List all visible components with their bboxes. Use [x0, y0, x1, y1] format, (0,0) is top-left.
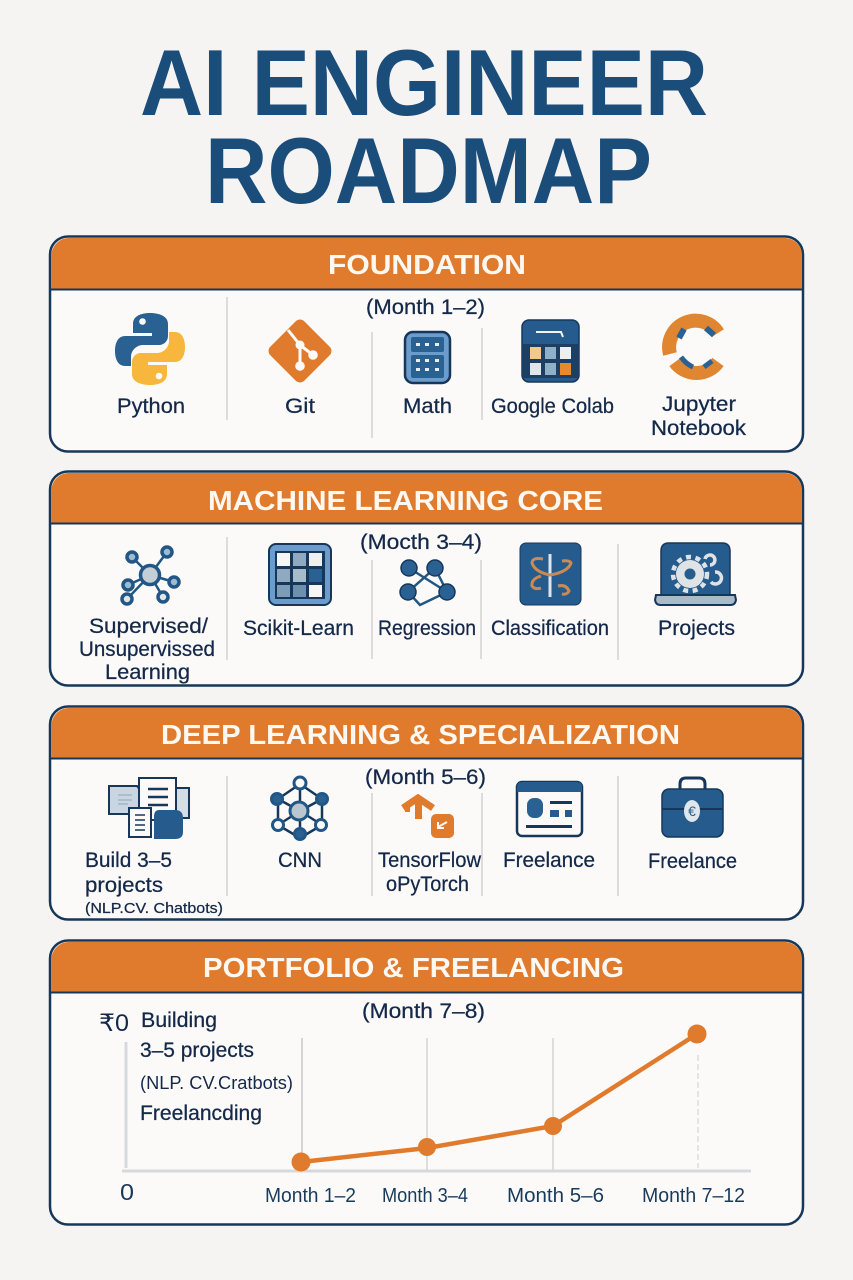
heading: deep learning and specialization: DEEP LEARNING & SPECIALIZATION	[161, 719, 680, 750]
panel: machine learning core	[50, 472, 803, 686]
label: build projects	[85, 849, 223, 917]
text block: building notes	[140, 1009, 293, 1125]
icon: classification	[520, 543, 581, 605]
subtitle: month 3-4: (Mocth 3–4)	[360, 531, 482, 554]
icon: jupyter	[669, 321, 718, 373]
heading: portfolio and freelancing	[51, 942, 802, 992]
text block: building notes: Building	[141, 1009, 217, 1032]
icon: briefcase: €	[688, 803, 696, 819]
axis labels: 0	[120, 1179, 134, 1205]
label: classification: Classification	[491, 617, 609, 640]
label: projects: Projects	[658, 617, 735, 640]
icon: documents and chat	[109, 778, 189, 838]
icon: cnn network	[272, 777, 328, 840]
label: git: Git	[285, 395, 315, 418]
label: tensorflow pytorch: oPyTorch	[386, 873, 469, 896]
subtitle: month 1-2: (Month 1–2)	[366, 296, 485, 319]
label: tensorflow pytorch	[378, 849, 482, 896]
label: build projects: (NLP.CV. Chatbots)	[85, 900, 223, 917]
icon: regression nodes	[400, 560, 455, 605]
icon: laptop with gear	[655, 543, 736, 605]
label: supervised unsupervised learning	[79, 615, 215, 684]
heading: machine learning core	[51, 473, 802, 524]
label: jupyter notebook	[651, 393, 747, 440]
label: scikit-learn: Scikit-Learn	[243, 617, 354, 640]
label: freelance 2: Freelance	[648, 850, 737, 873]
icon: web profile card	[517, 782, 582, 836]
title: ROADMAP	[205, 118, 652, 223]
label: jupyter notebook: Notebook	[651, 417, 747, 440]
label: google colab: Google Colab	[491, 395, 614, 418]
subtitle: month 5-6: (Month 5–6)	[365, 766, 486, 789]
icon: google colab	[522, 320, 579, 382]
icon: network	[122, 547, 179, 604]
icon: python	[115, 313, 185, 385]
label: tensorflow pytorch: TensorFlow	[378, 849, 482, 872]
title	[140, 30, 708, 223]
axis labels: Month 3–4	[382, 1185, 468, 1207]
heading: foundation: FOUNDATION	[328, 249, 526, 280]
icon: git	[266, 317, 334, 385]
heading: machine learning core: MACHINE LEARNING CORE	[208, 485, 603, 516]
text block: building notes: (NLP. CV.Cratbots)	[140, 1073, 293, 1093]
icon: briefcase	[662, 778, 723, 837]
panel: foundation	[50, 236, 803, 452]
label: jupyter notebook: Jupyter	[662, 393, 736, 416]
label: python: Python	[117, 395, 185, 418]
label: math: Math	[403, 395, 452, 418]
text block: building notes: Freelancding	[140, 1102, 262, 1125]
label: build projects: Build 3–5	[85, 849, 172, 872]
title: AI ENGINEER	[140, 30, 708, 135]
label: supervised unsupervised learning: Unsupervissed	[79, 638, 215, 661]
axis labels: Month 5–6	[507, 1185, 604, 1207]
label: regression: Regression	[378, 617, 476, 640]
axis labels	[120, 1179, 745, 1207]
panel: portfolio and freelancing	[50, 940, 803, 1224]
axis labels: Month 1–2	[265, 1185, 356, 1207]
axis labels: Month 7–12	[642, 1185, 745, 1207]
label: supervised unsupervised learning: Learning	[105, 661, 190, 684]
axis label: rupee zero: ₹0	[99, 1010, 129, 1037]
icon: math calculator	[405, 332, 450, 383]
label: freelance: Freelance	[503, 849, 595, 872]
label: build projects: projects	[85, 874, 163, 897]
label: supervised unsupervised learning: Supervised/	[89, 615, 208, 638]
heading: foundation	[51, 238, 802, 290]
heading: deep learning and specialization	[51, 708, 802, 758]
text block: building notes: 3–5 projects	[140, 1039, 254, 1062]
panel: deep learning and specialization	[50, 706, 803, 920]
icon: scikit-learn grid	[269, 544, 331, 605]
label: cnn: CNN	[278, 849, 322, 872]
chart: income line	[122, 1024, 751, 1172]
icon: tensorflow and pytorch	[403, 798, 454, 838]
heading: portfolio and freelancing: PORTFOLIO & FREELANCING	[203, 952, 624, 983]
subtitle: month 7-8: (Month 7–8)	[362, 1000, 485, 1023]
